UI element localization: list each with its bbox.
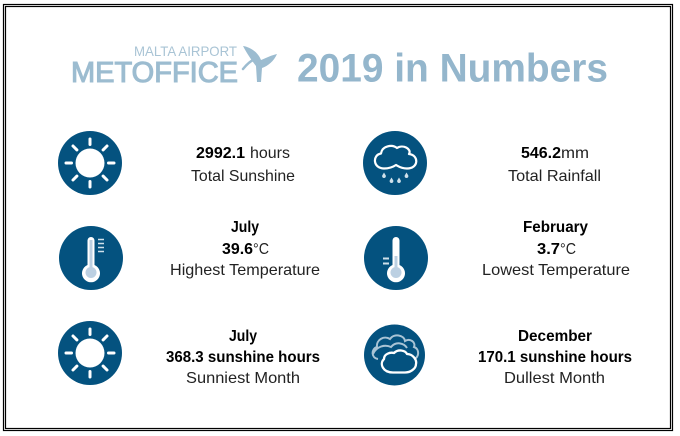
stat: total sunshine: Total Sunshine bbox=[191, 168, 295, 185]
stat: total rainfall: 546.2 bbox=[521, 145, 561, 162]
stat: total rainfall: Total Rainfall bbox=[508, 168, 601, 185]
stat: highest temperature: July bbox=[231, 219, 259, 236]
stat: lowest temperature: °C bbox=[560, 241, 576, 258]
stat: sunniest month: Sunniest Month bbox=[186, 370, 300, 387]
icon: rain cloud, total rainfall bbox=[363, 131, 427, 195]
icon: sun, sunniest month bbox=[58, 321, 122, 385]
stat: dullest month: December bbox=[518, 328, 592, 345]
stat: sunniest month: 368.3 sunshine hours bbox=[166, 349, 320, 366]
stat: dullest month bbox=[478, 328, 632, 387]
stat: total rainfall bbox=[508, 145, 601, 185]
stat: total rainfall: mm bbox=[561, 145, 589, 162]
stat: highest temperature bbox=[170, 219, 320, 279]
icon: clouds, dullest month bbox=[364, 324, 425, 386]
stat: lowest temperature bbox=[482, 219, 630, 279]
stat: lowest temperature: February bbox=[523, 219, 588, 236]
stat: highest temperature: Highest Temperature bbox=[170, 262, 320, 279]
logo: Malta Airport MetOffice: METOFFICE bbox=[71, 57, 238, 89]
stat: dullest month: Dullest Month bbox=[504, 370, 605, 387]
stat: highest temperature: 39.6 bbox=[222, 241, 253, 258]
stat: highest temperature: °C bbox=[253, 241, 269, 258]
logo: Malta Airport MetOffice bbox=[71, 44, 277, 89]
stat: lowest temperature: 3.7 bbox=[537, 241, 560, 258]
stat: dullest month: 170.1 sunshine hours bbox=[478, 349, 632, 366]
stat: total sunshine: hours bbox=[250, 145, 290, 162]
stat: lowest temperature: Lowest Temperature bbox=[482, 262, 630, 279]
stat: total sunshine: 2992.1 bbox=[196, 145, 245, 162]
icon: thermometer, highest temperature bbox=[59, 226, 123, 290]
title: 2019 in Numbers bbox=[297, 46, 608, 90]
logo: Malta Airport MetOffice: MALTA AIRPORT bbox=[134, 44, 237, 59]
icon: sun, total sunshine bbox=[58, 131, 122, 195]
stat: sunniest month bbox=[166, 328, 320, 387]
stat: total sunshine bbox=[191, 145, 295, 185]
stat: sunniest month: July bbox=[229, 328, 257, 345]
icon: thermometer, lowest temperature bbox=[364, 226, 428, 290]
